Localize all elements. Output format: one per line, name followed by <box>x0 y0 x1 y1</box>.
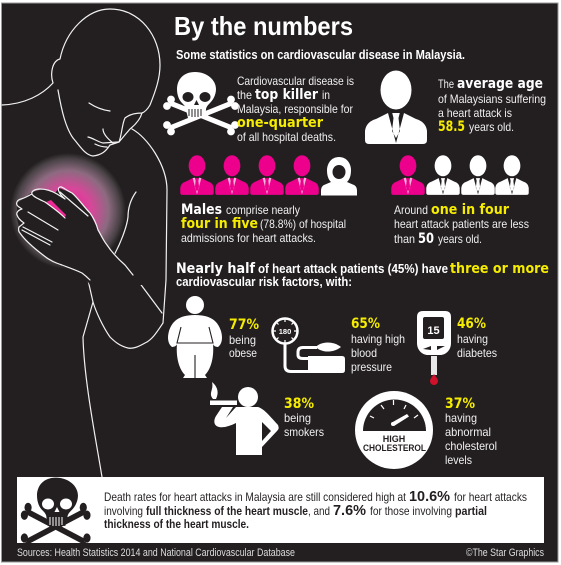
icon: white man 3 <box>495 155 529 195</box>
section heading: risk factors: three or more <box>450 261 549 277</box>
text: smokers: 38% <box>284 396 314 412</box>
text: death rates: , and <box>308 504 330 518</box>
text: obese: 77% <box>229 317 259 333</box>
text: smokers: being <box>284 411 311 425</box>
text: diabetes: 46% <box>457 316 486 332</box>
text: top killer: top killer <box>255 87 318 103</box>
text: one in four: heart attack patients are less <box>394 217 529 231</box>
text: obese <box>229 317 259 360</box>
text: one in four: years old. <box>438 232 482 246</box>
finger lines <box>22 192 88 245</box>
icon: man 2 <box>215 155 249 195</box>
text: top killer: one-quarter <box>237 115 323 131</box>
text: diabetes: having <box>457 332 488 346</box>
text: cholesterol: levels <box>445 453 472 467</box>
text: one in four: than <box>394 232 415 246</box>
text: males: comprise nearly <box>226 203 300 217</box>
text: blood pressure <box>351 316 405 374</box>
section heading: risk factors: of heart attack patients (45%) have <box>258 262 448 276</box>
icon: white man 1 <box>426 155 460 195</box>
text: death rates: full thickness of the heart muscle <box>146 504 308 518</box>
panel: top killer <box>164 72 354 144</box>
icon: obese person <box>168 296 222 378</box>
text: blood pressure: 65% <box>351 316 380 332</box>
text: males: Males <box>181 202 222 218</box>
body outline <box>2 9 167 477</box>
text: cholesterol: abnormal <box>445 425 491 439</box>
text: obese: being <box>229 333 256 347</box>
text: death rates: for heart attacks <box>454 490 527 504</box>
text: blood pressure: blood <box>351 346 377 360</box>
text: top killer: the <box>237 88 252 102</box>
text: one in four: Around <box>394 203 428 217</box>
icon group: one pink man and three white men <box>391 155 529 195</box>
section heading: risk factors: Nearly half <box>176 261 256 277</box>
text: top killer: in <box>322 88 330 102</box>
text: death rates: partial <box>455 504 487 518</box>
risk factor: obese <box>168 296 259 378</box>
text: males: (78.8%) of hospital <box>260 217 346 231</box>
hand outline <box>17 187 133 280</box>
icon: man 4 <box>285 155 319 195</box>
panel: one in four <box>391 155 529 247</box>
text: top killer: Malaysia, responsible for <box>237 102 353 116</box>
illustration: man clutching chest <box>2 9 167 477</box>
text: death rates: 7.6% <box>333 502 366 519</box>
text: obese: obese <box>229 346 257 360</box>
icon: pink man <box>391 155 425 195</box>
credit: ©The Star Graphics <box>466 547 544 559</box>
text: average age: average age <box>457 76 543 92</box>
icon: blood pressure monitor: 180 <box>279 327 291 336</box>
text: males: admissions for heart attacks. <box>181 231 316 245</box>
section heading: risk factors <box>176 261 549 289</box>
icon: high cholesterol gauge <box>355 391 433 469</box>
pink wedge between fingers <box>46 200 66 217</box>
text: smokers <box>284 396 324 439</box>
text: average age: 58.5 <box>438 119 465 135</box>
text: cholesterol: cholesterol <box>445 439 497 453</box>
text: cholesterol <box>445 396 497 467</box>
text: average age: years old. <box>469 120 514 134</box>
icon: white man 2 <box>461 155 495 195</box>
text: cholesterol: having <box>445 411 477 425</box>
hand <box>17 187 145 285</box>
text: males: four in five <box>181 216 258 232</box>
text: death rates: 10.6% <box>409 488 450 505</box>
text: cholesterol: 37% <box>445 396 475 412</box>
icon: white skull and crossbones <box>164 72 238 135</box>
text: one in four <box>394 202 529 247</box>
panel: average age <box>365 70 546 144</box>
text: top killer: Cardiovascular disease is <box>237 74 354 88</box>
text: average age: of Malaysians suffering <box>438 92 546 106</box>
text: death rates <box>104 488 527 531</box>
icon: man 3 <box>250 155 284 195</box>
panel: death rates callout <box>17 477 544 550</box>
text: diabetes <box>457 316 497 360</box>
text: blood pressure: having high <box>351 332 405 346</box>
risk factor: diabetes <box>417 311 497 385</box>
risk factor: smokers <box>210 382 324 455</box>
text: death rates: for those involving <box>370 504 452 518</box>
icon: man 1 <box>180 155 214 195</box>
sources footer: Sources: Health Statistics 2014 and National Cardiovascular Database <box>17 547 295 559</box>
panel: males <box>180 155 357 245</box>
hand fill <box>17 188 145 285</box>
text: one in four: one in four <box>431 202 509 218</box>
text: blood pressure: pressure <box>351 360 392 374</box>
icon: smoker <box>210 382 279 455</box>
text: smokers: smokers <box>284 425 324 439</box>
heart pain glow <box>10 153 126 269</box>
text: death rates: Death rates for heart attacks in Malaysia are still considered high at <box>104 490 407 504</box>
risk factor: cholesterol <box>355 391 497 469</box>
text: top killer <box>237 74 354 144</box>
text: diabetes: diabetes <box>457 346 497 360</box>
risk factor: blood pressure <box>272 316 405 374</box>
text: males <box>181 202 346 245</box>
icon: businessman <box>365 70 427 144</box>
text: death rates: thickness of the heart muscle. <box>104 517 249 531</box>
icon: high cholesterol gauge: CHOLESTEROL <box>363 443 426 453</box>
text: death rates: involving <box>104 504 143 518</box>
icon: dark skull and crossbones <box>21 478 90 550</box>
text: average age: The <box>438 77 454 91</box>
title: By the numbers <box>174 11 353 41</box>
icon: glucose meter: 15 <box>427 325 440 337</box>
icon group: four men and one woman <box>180 155 357 196</box>
section heading: risk factors: cardiovascular risk factors, with: <box>176 275 352 289</box>
text: average age: a heart attack is <box>438 106 512 120</box>
text: one in four: 50 <box>418 231 434 247</box>
text: average age <box>438 76 546 135</box>
icon: high cholesterol gauge: HIGH <box>383 434 405 444</box>
text: top killer: of all hospital deaths. <box>237 130 336 144</box>
subtitle: Some statistics on cardiovascular disease in Malaysia. <box>176 48 465 62</box>
icon: woman <box>321 157 357 196</box>
